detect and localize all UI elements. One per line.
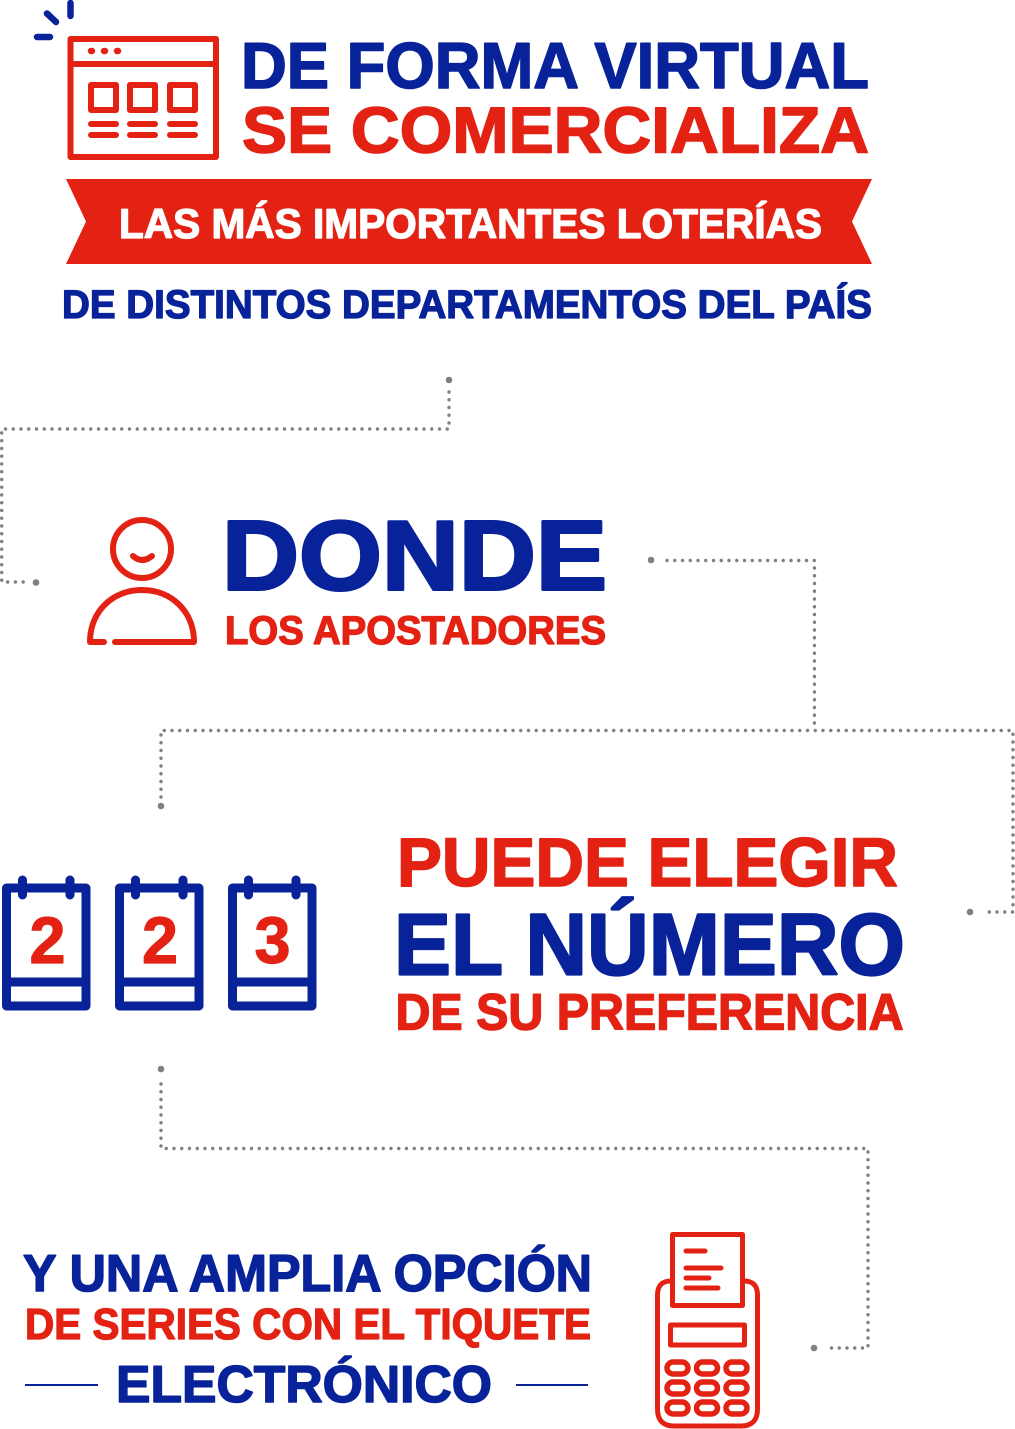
icon: calendar 2: 2 xyxy=(30,903,66,977)
icon: calendar 2 xyxy=(6,880,86,1006)
connector: donde to puede elegir xyxy=(158,557,1013,915)
icon: calendar 2 xyxy=(120,880,199,1006)
icon: person xyxy=(90,520,194,642)
text: y una amplia opción: Y UNA AMPLIA OPCIÓN xyxy=(23,1245,592,1303)
icon: browser window with sparkle xyxy=(37,3,216,157)
ribbon banner: LAS MÁS IMPORTANTES LOTERÍAS xyxy=(119,200,822,247)
text: los apostadores: LOS APOSTADORES xyxy=(225,609,606,653)
title line: se comercializa: SE COMERCIALIZA xyxy=(242,94,869,166)
icon: calendar 2: 2 xyxy=(142,903,178,977)
icon: calendar 3 xyxy=(232,880,312,1006)
text: de series con el tiquete: DE SERIES CON EL TIQUETE xyxy=(25,1300,591,1349)
connector: puede elegir to series xyxy=(158,1066,868,1351)
heading: el número: EL NÚMERO xyxy=(394,896,905,994)
text: electrónico with side rules: ELECTRÓNICO xyxy=(116,1356,492,1414)
heading: puede elegir: PUEDE ELEGIR xyxy=(397,824,898,901)
ribbon banner xyxy=(66,179,872,264)
text: de su preferencia: DE SU PREFERENCIA xyxy=(396,984,904,1040)
title line: de forma virtual: DE FORMA VIRTUAL xyxy=(241,29,869,102)
heading: donde: DONDE xyxy=(222,500,607,610)
icon: payment terminal with receipt xyxy=(658,1234,758,1426)
subtitle: DE DISTINTOS DEPARTAMENTOS DEL PAÍS xyxy=(62,282,872,327)
icon: calendar 3: 3 xyxy=(254,903,290,977)
connector: header to donde xyxy=(2,377,452,586)
